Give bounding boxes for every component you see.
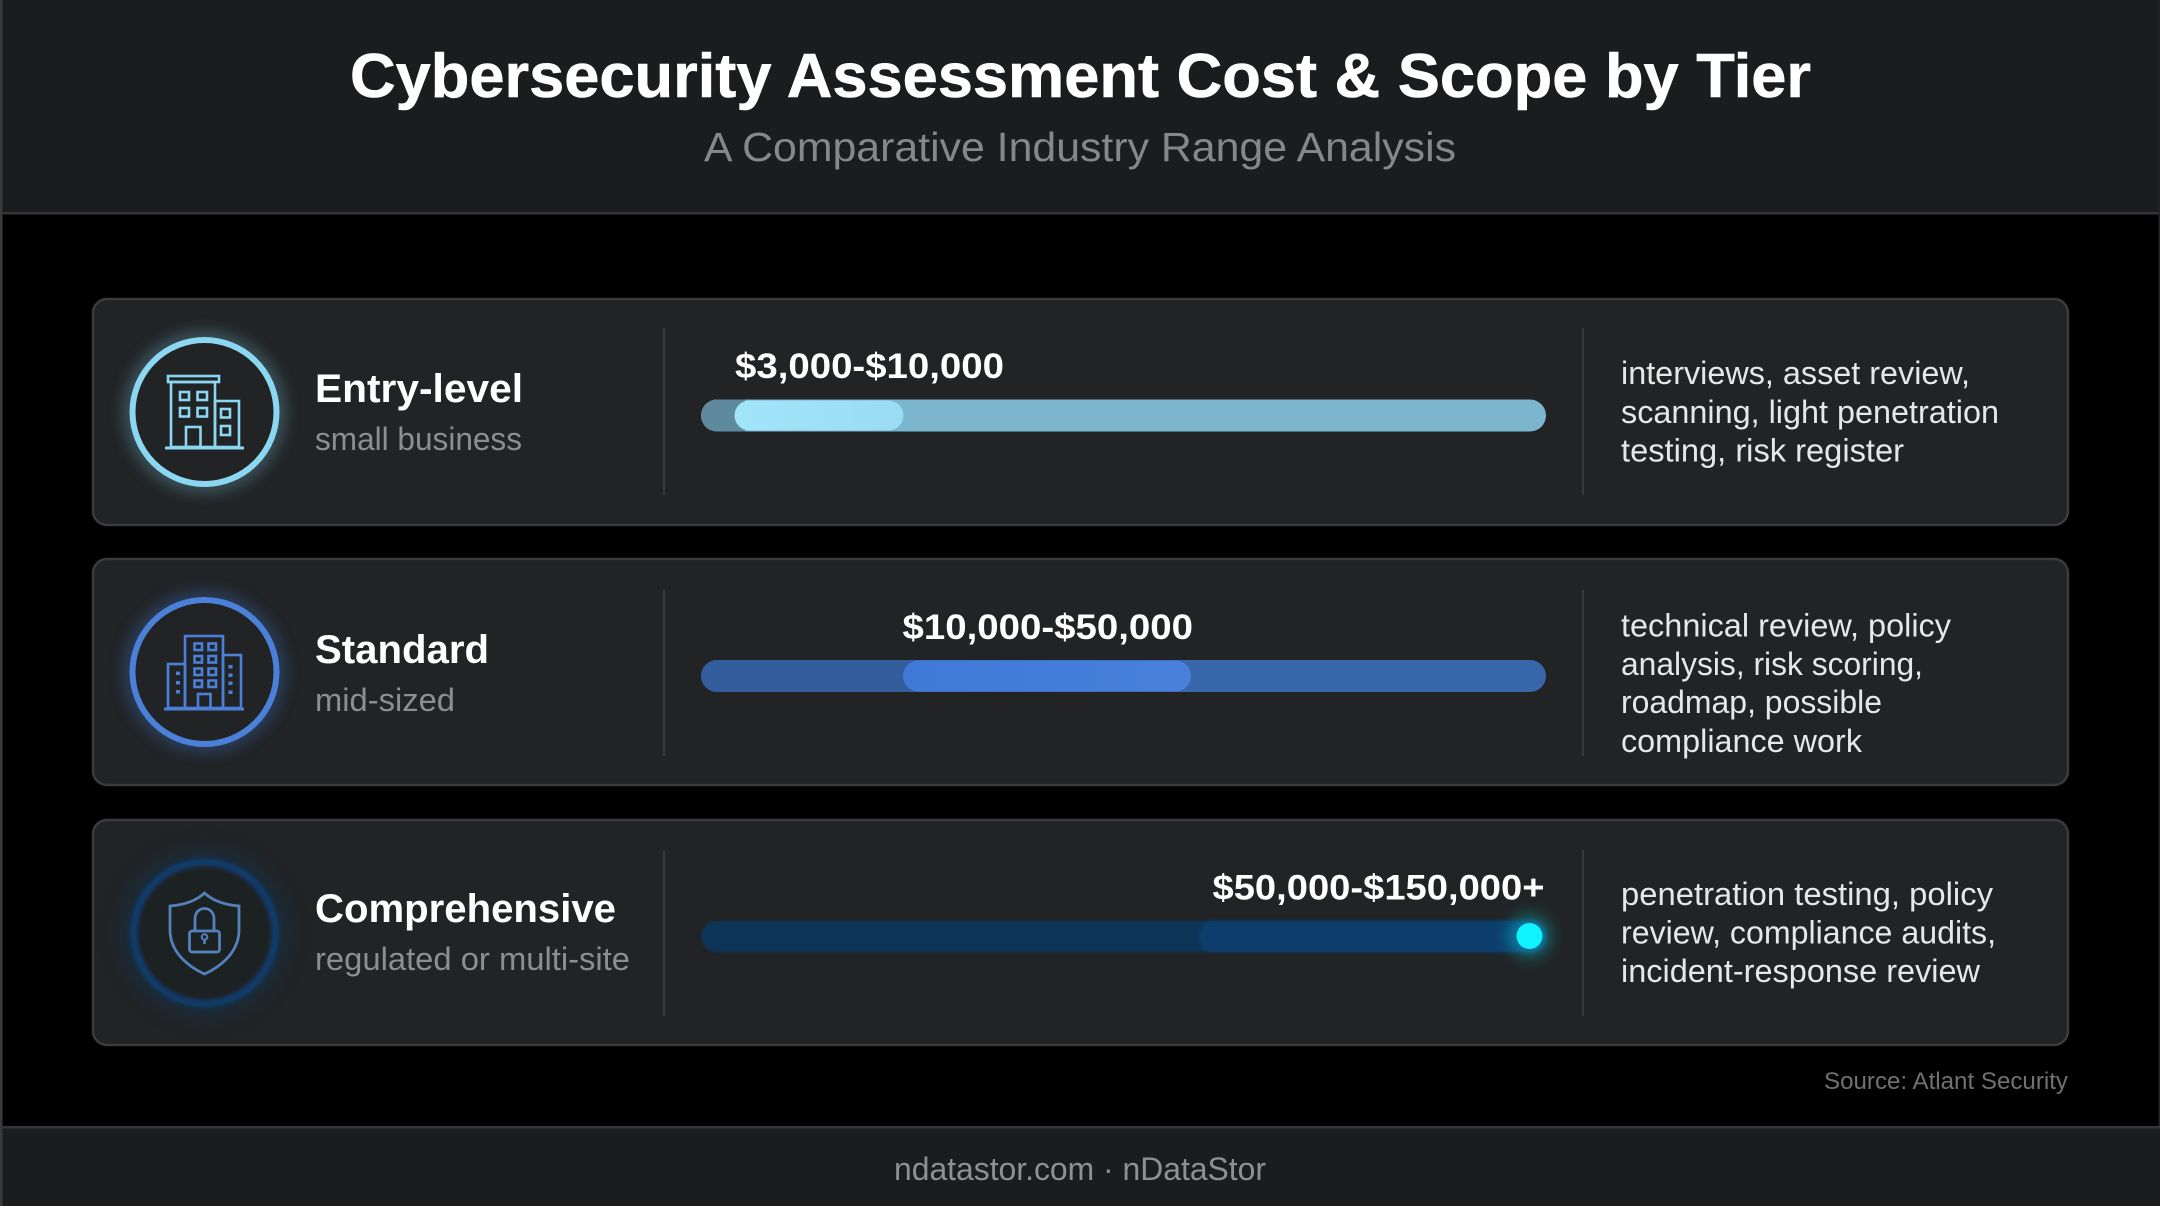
tier audience: regulated or multi-site — [315, 941, 630, 977]
scope description: interviews, asset review, — [1621, 355, 1970, 391]
tier audience: mid-sized — [315, 682, 455, 718]
price label: $50,000-$150,000+ — [1212, 868, 1544, 908]
panel: comprehensive tier — [93, 820, 2068, 1045]
icon: office building in light blue ring — [132, 340, 276, 484]
footer band — [0, 1126, 2160, 1206]
tier name: Standard — [315, 628, 489, 672]
scope description — [1621, 608, 1951, 759]
source note: Source: Atlant Security — [1824, 1068, 2068, 1095]
range bar — [701, 916, 1550, 956]
panel: standard tier — [93, 559, 2068, 785]
scope description: testing, risk register — [1621, 432, 1904, 468]
scope description: roadmap, possible — [1621, 684, 1882, 720]
tier name: Comprehensive — [315, 887, 616, 931]
panel: entry-level tier — [93, 299, 2068, 525]
tier name: Entry-level — [315, 367, 523, 411]
price label: $10,000-$50,000 — [902, 608, 1193, 647]
footer text: ndatastor.com · nDataStor — [894, 1151, 1266, 1187]
price label: $3,000-$10,000 — [735, 347, 1004, 386]
scope description: technical review, policy — [1621, 608, 1951, 644]
title: Cybersecurity Assessment Cost & Scope by Tier — [350, 42, 1811, 111]
scope description: incident-response review — [1621, 953, 1981, 989]
scope description: penetration testing, policy — [1621, 876, 1993, 912]
subtitle: A Comparative Industry Range Analysis — [704, 124, 1456, 170]
icon: shield with padlock in dark blue ring — [132, 861, 276, 1005]
range bar — [701, 660, 1546, 692]
scope description: analysis, risk scoring, — [1621, 646, 1923, 682]
scope description — [1621, 355, 1999, 468]
cyan end marker — [1510, 916, 1550, 956]
icon: office tower in blue ring — [132, 600, 276, 744]
range bar — [701, 400, 1546, 432]
header band — [0, 0, 2160, 214]
scope description: compliance work — [1621, 723, 1863, 759]
tier audience: small business — [315, 421, 522, 457]
scope description — [1621, 876, 1996, 989]
scope description: scanning, light penetration — [1621, 394, 1999, 430]
scope description: review, compliance audits, — [1621, 914, 1996, 950]
